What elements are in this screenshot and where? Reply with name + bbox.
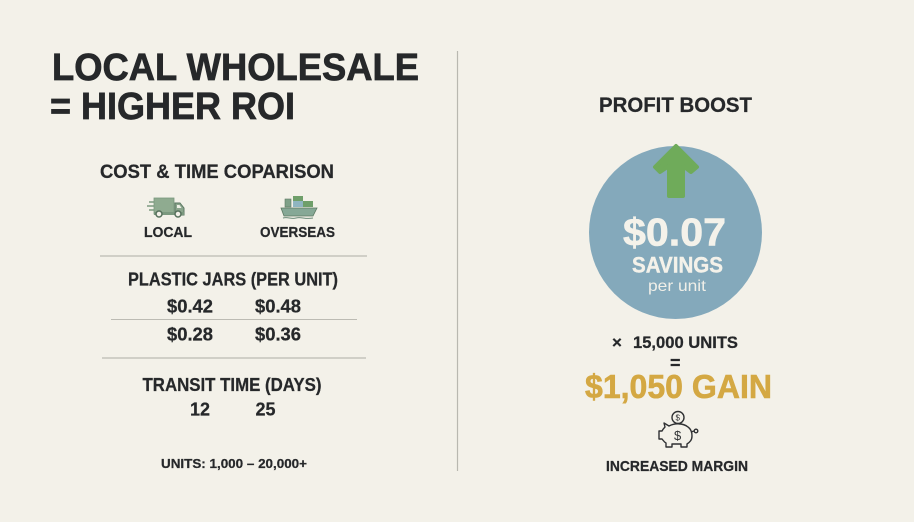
transit values: 25	[256, 400, 276, 420]
heading: profit boost: PROFIT BOOST	[599, 94, 752, 117]
price row 2: $0.36	[255, 324, 301, 344]
transit values: 12	[190, 400, 210, 420]
multiplier: ×	[612, 333, 622, 352]
icon: piggy bank: $	[676, 414, 680, 422]
subheading: plastic jars: PLASTIC JARS (PER UNIT)	[128, 270, 338, 290]
transit values	[190, 400, 276, 420]
savings amount: $0.07	[623, 212, 726, 254]
multiplier: 15,000 UNITS	[633, 333, 738, 352]
per unit label: per unit	[648, 278, 707, 295]
heading: comparison: COST & TIME COPARISON	[100, 162, 334, 183]
savings circle	[589, 146, 762, 319]
panel: profit boost	[585, 94, 772, 475]
price row 2	[167, 324, 301, 344]
column label: local: LOCAL	[144, 225, 192, 241]
price row 1: $0.48	[255, 296, 301, 316]
title	[50, 47, 419, 128]
icon: up arrow	[655, 146, 697, 196]
total gain: $1,050 GAIN	[585, 368, 772, 405]
title: = HIGHER ROI	[50, 86, 295, 128]
price row 1	[167, 296, 301, 316]
column label: overseas: OVERSEAS	[260, 225, 335, 241]
equals sign: =	[670, 353, 681, 373]
price row 1: $0.42	[167, 296, 213, 316]
panel: cost and time comparison	[100, 162, 367, 471]
icon: piggy bank	[659, 412, 698, 447]
savings label: SAVINGS	[632, 252, 723, 278]
icon: piggy bank: $	[674, 428, 682, 443]
units note: UNITS: 1,000 – 20,000+	[161, 456, 307, 471]
price row 2: $0.28	[167, 324, 213, 344]
increased margin label: INCREASED MARGIN	[606, 458, 748, 475]
subheading: transit time: TRANSIT TIME (DAYS)	[142, 375, 322, 395]
title: LOCAL WHOLESALE	[52, 47, 419, 89]
icon: delivery truck	[147, 198, 184, 217]
icon: cargo ship	[281, 196, 317, 218]
